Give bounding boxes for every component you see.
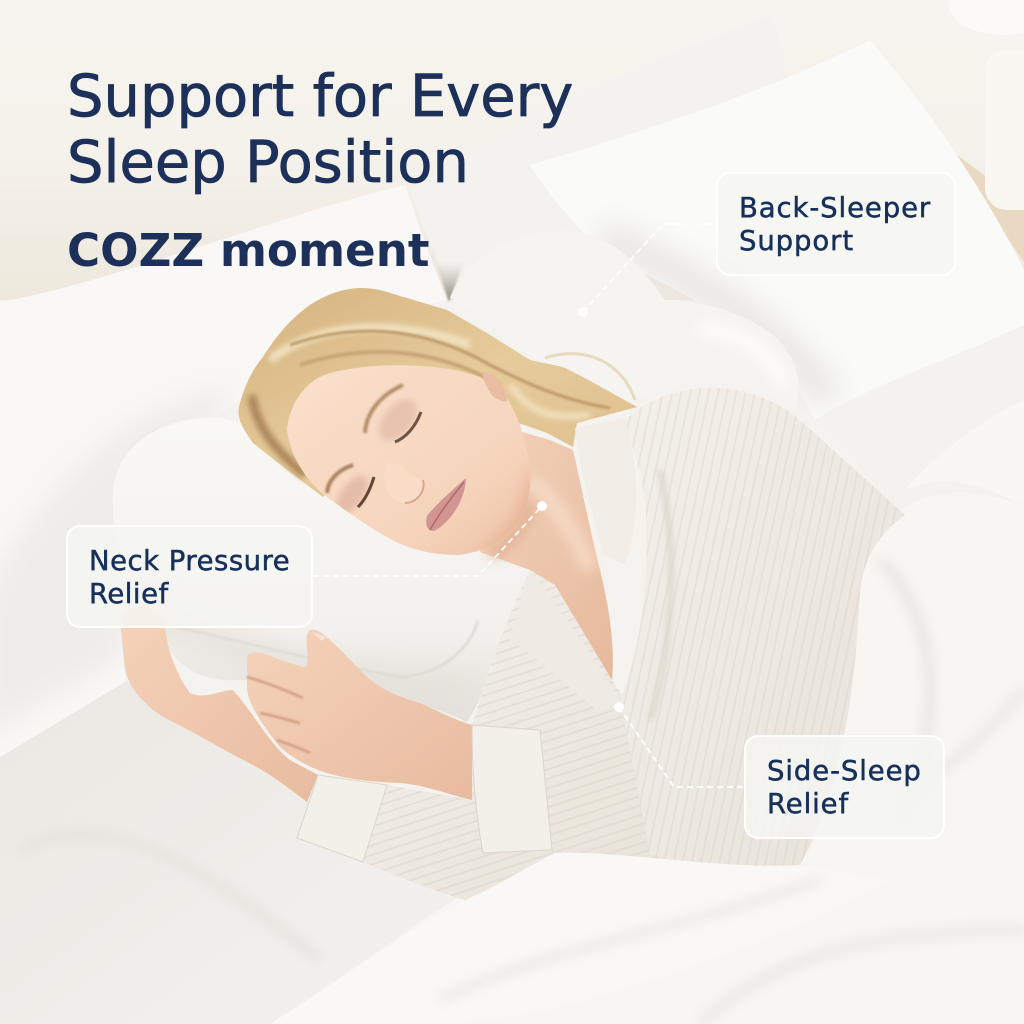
contour pillow near lobe <box>113 418 532 722</box>
title <box>67 63 573 196</box>
leader line: back-sleeper <box>578 226 662 317</box>
loose hair wisp <box>545 354 635 400</box>
label: neck <box>66 525 313 628</box>
right side bedding <box>815 325 1024 520</box>
brand name: COZZ moment <box>67 224 429 277</box>
callout: neck pressure relief <box>66 501 547 628</box>
woman: left hand behind pillow <box>121 603 318 802</box>
woman: lower cuff <box>297 775 387 862</box>
leader line: neck <box>313 501 547 577</box>
label: side-sleep: Relief <box>767 788 849 820</box>
title: Sleep Position <box>67 129 469 196</box>
woman: neck and chest <box>480 430 613 680</box>
woman: right hand and forearm <box>247 630 472 800</box>
upper wall <box>0 0 1024 300</box>
back pillow right <box>530 40 1024 420</box>
label: back-sleeper: Support <box>739 225 854 257</box>
woman: collar <box>510 418 636 712</box>
callout: side-sleep relief <box>614 702 945 839</box>
title: Support for Every <box>67 63 573 130</box>
label: neck: Neck Pressure <box>89 545 290 577</box>
main left pillow <box>0 185 447 757</box>
mattress and sheet <box>0 680 470 1024</box>
woman: face <box>287 365 545 560</box>
label: back-sleeper: Back-Sleeper <box>739 192 931 224</box>
duvet fold over hip <box>270 853 890 1024</box>
label: back-sleeper <box>716 172 956 276</box>
woman: ear <box>482 372 507 402</box>
back pillow left <box>410 15 795 302</box>
duvet <box>270 492 1024 1024</box>
woman: upper cuff <box>472 725 552 853</box>
woman: pajama body <box>363 570 720 900</box>
contour pillow far lobe <box>450 231 798 412</box>
label: side-sleep <box>744 735 945 839</box>
woman: hair <box>239 288 637 497</box>
bedside table and lamp <box>949 0 1024 262</box>
leader line: side-sleep <box>614 702 743 788</box>
woman: upper sleeve and torso <box>620 388 905 867</box>
label: side-sleep: Side-Sleep <box>767 755 922 787</box>
callout: back-sleeper support <box>578 192 931 317</box>
label: neck: Relief <box>89 578 169 610</box>
